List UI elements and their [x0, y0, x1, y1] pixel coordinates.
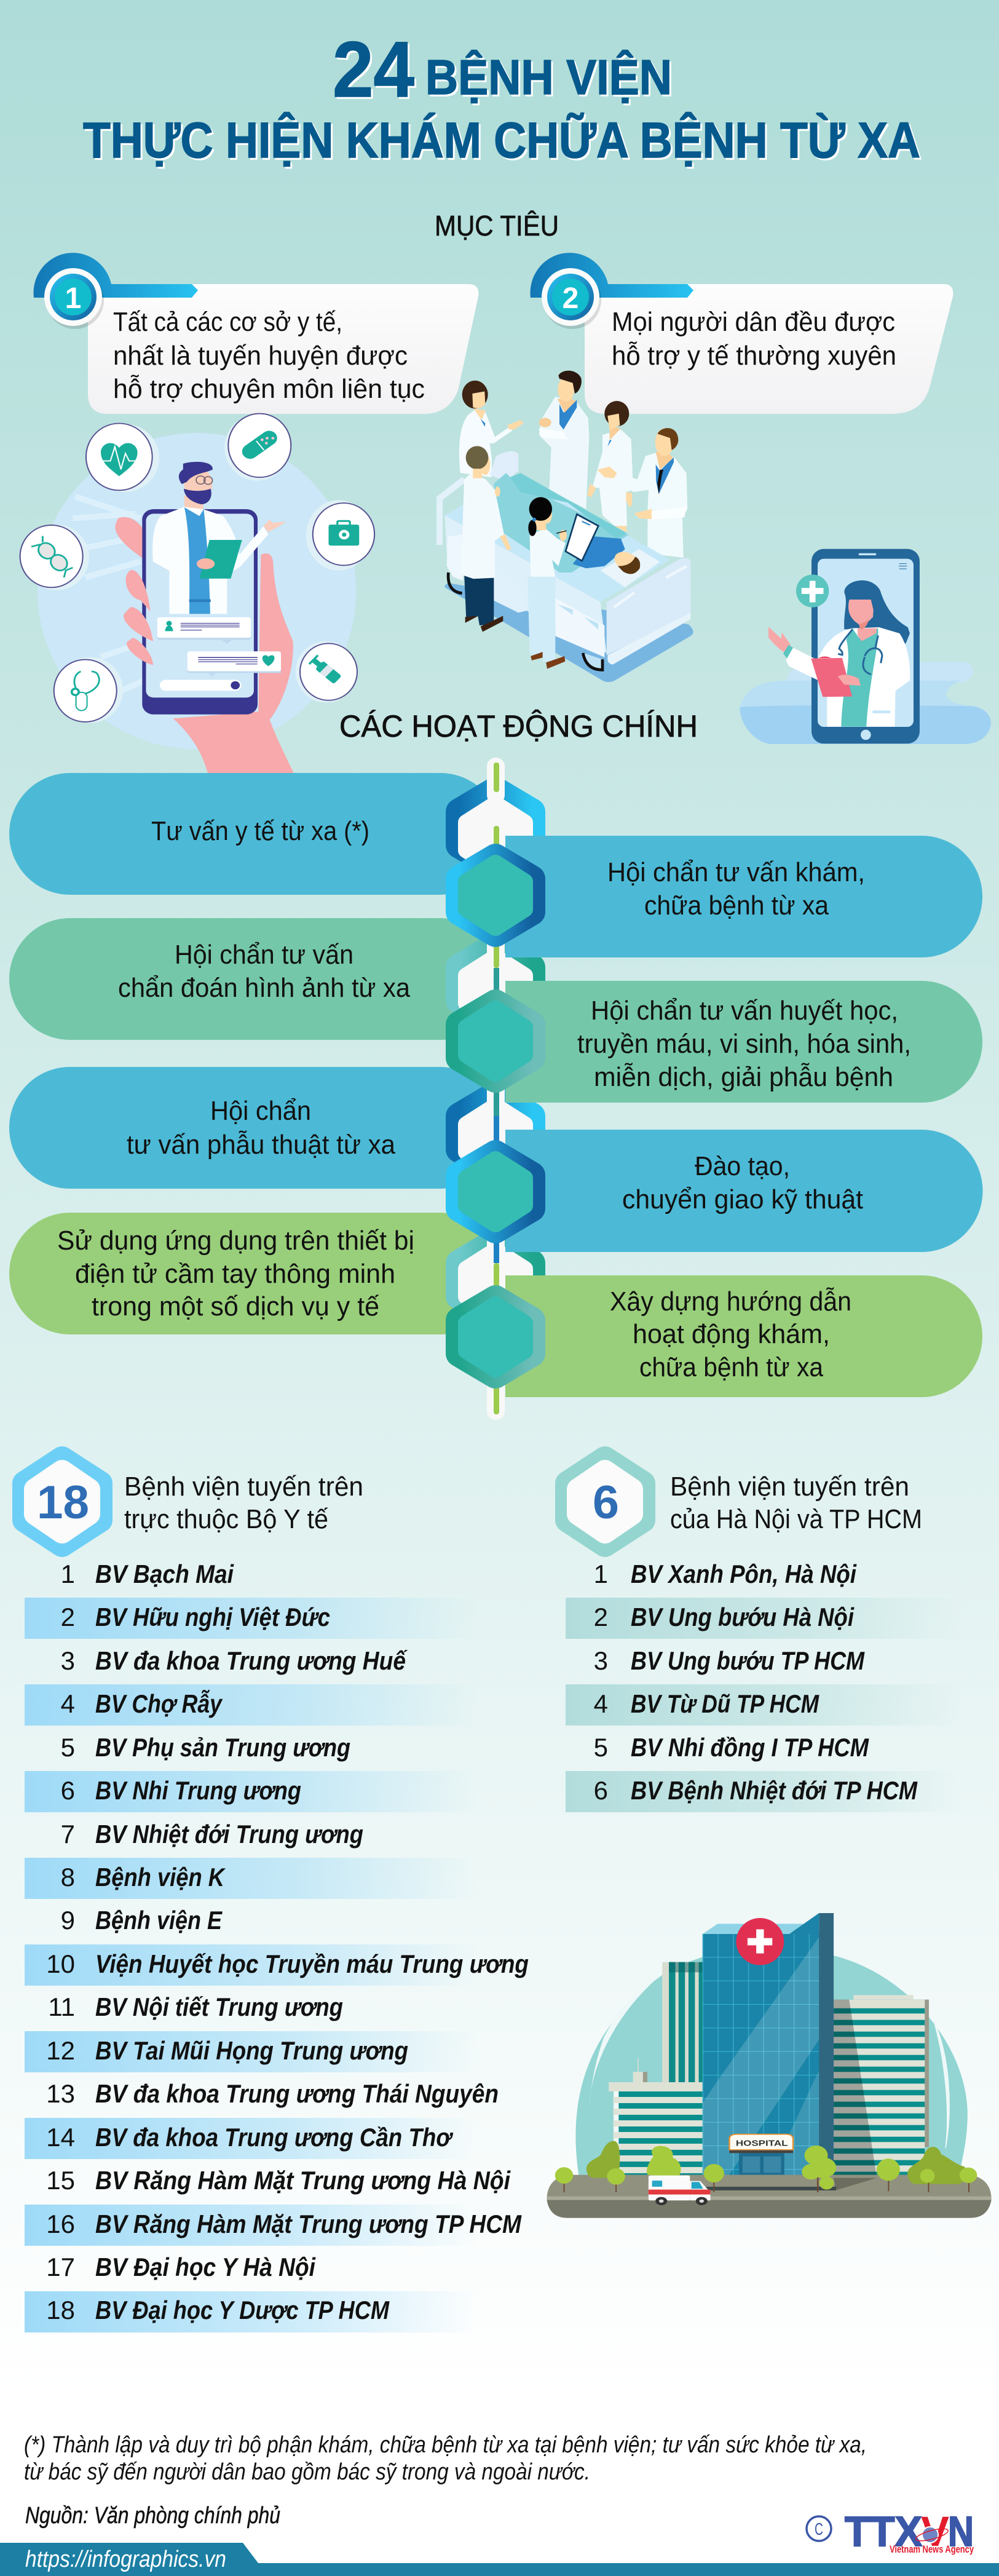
activity labels: Đào tạo, [695, 1151, 790, 1181]
right activity pills [505, 836, 982, 1397]
activity labels: miễn dịch, giải phẫu bệnh [594, 1062, 893, 1092]
list: 6 hospitals of Hanoi and HCMC: 3 [594, 1646, 608, 1675]
heading: 18 hospitals: Bệnh viện tuyến trên [124, 1472, 363, 1502]
list: 6 hospitals of Hanoi and HCMC: 4 [594, 1689, 608, 1718]
list: 18 hospitals under the Ministry of Health: 7 [61, 1820, 75, 1849]
top finger [115, 517, 148, 561]
list: 18 hospitals under the Ministry of Health: 15 [46, 2166, 75, 2195]
list: 18 hospitals under the Ministry of Health: BV Tai Mũi Họng Trung ương [95, 2036, 408, 2065]
list: 18 hospitals under the Ministry of Health: BV Răng Hàm Mặt Trung ương Hà Nội [95, 2166, 511, 2195]
panel: goal 1: 1 [65, 282, 81, 315]
list: 18 hospitals under the Ministry of Health: BV Nội tiết Trung ương [95, 1992, 343, 2021]
logo: TTXVN: TTX [845, 2508, 922, 2555]
list: 6 hospitals of Hanoi and HCMC: BV Ung bướu Hà Nội [631, 1603, 855, 1631]
goal 2 text: hỗ trợ y tế thường xuyên [612, 341, 896, 371]
logo: TTXVN: V [921, 2508, 949, 2555]
list: 18 hospitals under the Ministry of Health: BV Chợ Rẫy [95, 1689, 223, 1718]
left column building [633, 1962, 703, 2083]
list: 18 hospitals under the Ministry of Health: 1 [61, 1559, 75, 1588]
list: 6 hospitals of Hanoi and HCMC: BV Xanh Pôn, Hà Nội [631, 1559, 857, 1588]
doctor: man with crossed arms [539, 371, 589, 509]
goal 1 text: Tất cả các cơ sở y tế, [113, 307, 342, 337]
list: 18 hospitals under the Ministry of Health: BV đa khoa Trung ương Huế [95, 1646, 408, 1675]
list: 18 hospitals under the Ministry of Health: 10 [46, 1949, 75, 1978]
phone [811, 549, 920, 743]
list: 6 hospitals of Hanoi and HCMC: BV Bệnh Nhiệt đới TP HCM [631, 1776, 918, 1805]
logo: TTXVN: N [948, 2508, 974, 2555]
goal 2 text [612, 307, 896, 371]
ambulance [649, 2176, 711, 2205]
icon: bandage [228, 414, 291, 477]
list: 6 hospitals of Hanoi and HCMC [566, 1559, 962, 1812]
phone [142, 509, 258, 715]
central glass tower [703, 1913, 834, 2190]
badge: 6 hospitals: 6 [593, 1476, 619, 1529]
panel: goal 1 [34, 253, 478, 414]
activity labels: Hội chẩn tư vấn khám, [607, 857, 865, 887]
activity labels: chuyển giao kỹ thuật [622, 1184, 863, 1215]
heading: 6 hospitals [670, 1472, 922, 1534]
doctor: woman short hair [587, 401, 633, 533]
list: 18 hospitals under the Ministry of Health: BV Bạch Mai [95, 1559, 234, 1588]
list: 18 hospitals under the Ministry of Health [25, 1559, 529, 2332]
activity labels: Sử dụng ứng dụng trên thiết bị [57, 1226, 414, 1256]
backdrop dome [575, 1946, 968, 2177]
activity labels: chữa bệnh từ xa [639, 1352, 823, 1382]
goal 1 text: hỗ trợ chuyên môn liên tục [113, 374, 425, 404]
left low building [609, 2082, 703, 2177]
list: 18 hospitals under the Ministry of Health: 12 [46, 2036, 75, 2065]
doctor: woman back left [459, 381, 524, 477]
female doctor [768, 581, 910, 727]
hospital sign and door: HOSPITAL [736, 2138, 788, 2147]
activity labels: truyền máu, vi sinh, hóa sinh, [577, 1029, 911, 1059]
title: BỆNH VIỆN [425, 50, 672, 105]
goal 1 text: nhất là tuyến huyện được [113, 341, 408, 371]
illustration: phone with female doctor [740, 549, 991, 744]
list: 18 hospitals under the Ministry of Health: BV Hữu nghị Việt Đức [95, 1603, 330, 1631]
list: 18 hospitals under the Ministry of Health: Bệnh viện K [95, 1863, 226, 1892]
logo: TTXVN: C [815, 2519, 823, 2538]
heading: mục tiêu: MỤC TIÊU [435, 210, 559, 242]
list: 18 hospitals under the Ministry of Health: 8 [61, 1863, 75, 1892]
activity labels: chẩn đoán hình ảnh từ xa [118, 973, 410, 1003]
activity labels: Tư vấn y tế từ xa (*) [151, 816, 369, 846]
trees [555, 2141, 977, 2192]
red cross sign [736, 1918, 784, 1965]
list: 18 hospitals under the Ministry of Health: 9 [61, 1906, 75, 1935]
activity labels: Hội chẩn tư vấn huyết học, [591, 996, 898, 1026]
activity labels: Hội chẩn tư vấn [175, 940, 353, 970]
doctor in phone [152, 462, 286, 614]
heading: các hoạt động chính: CÁC HOẠT ĐỘNG CHÍNH [339, 709, 698, 743]
footnote: từ bác sỹ đến người dân bao gồm bác sỹ trong và ngoài nước. [24, 2459, 590, 2485]
footnote [24, 2432, 867, 2485]
icon: plus [796, 574, 829, 608]
heading: 6 hospitals: của Hà Nội và TP HCM [670, 1504, 922, 1534]
goal 2 text: Mọi người dân đều được [612, 307, 895, 337]
heading: 6 hospitals: Bệnh viện tuyến trên [670, 1472, 909, 1502]
panel: goal 2: 2 [563, 282, 578, 315]
illustration: hospital building [547, 1913, 992, 2218]
list: 18 hospitals under the Ministry of Health: BV Nhi Trung ương [95, 1776, 301, 1805]
logo: TTXVN [807, 2508, 974, 2555]
list: 6 hospitals of Hanoi and HCMC: 5 [594, 1733, 608, 1762]
heading: 18 hospitals: trực thuộc Bộ Y tế [124, 1504, 328, 1534]
list: 18 hospitals under the Ministry of Health: 13 [46, 2079, 75, 2108]
list: 18 hospitals under the Ministry of Health: 3 [61, 1646, 75, 1675]
title: 24 [333, 26, 414, 114]
goal 1 text [113, 307, 425, 404]
list: 18 hospitals under the Ministry of Health: 18 [46, 2296, 75, 2324]
activity labels: chữa bệnh từ xa [644, 890, 829, 921]
activity labels: tư vấn phẫu thuật từ xa [127, 1130, 396, 1160]
bed [440, 451, 693, 682]
illustration: doctors around patient bed [440, 371, 693, 682]
panel: activities chain [9, 758, 982, 1420]
doctor: man from back [461, 446, 511, 632]
list: 18 hospitals under the Ministry of Health: 6 [61, 1776, 75, 1805]
doctor: man with tie [598, 428, 687, 558]
list: 18 hospitals under the Ministry of Health: 11 [48, 1992, 75, 2021]
panel: goal 2 [531, 253, 953, 414]
chat bubbles [157, 617, 281, 691]
right building [834, 1995, 929, 2178]
list: 6 hospitals of Hanoi and HCMC: 6 [594, 1776, 608, 1805]
footer bar [0, 2543, 999, 2576]
street [547, 2175, 992, 2218]
list: 18 hospitals under the Ministry of Health: 14 [46, 2123, 75, 2152]
list: 18 hospitals under the Ministry of Health: BV Đại học Y Dược TP HCM [95, 2296, 390, 2324]
title: THỰC HIỆN KHÁM CHỮA BỆNH TỪ XA [83, 113, 920, 168]
icon: medical case [313, 503, 374, 565]
hospital sign and door [729, 2134, 793, 2189]
rear hexagons [459, 790, 532, 1318]
icon: syringe [300, 643, 357, 700]
list: 18 hospitals under the Ministry of Health: BV Nhiệt đới Trung ương [95, 1820, 363, 1849]
illustration: phone held in hand with doctor and medical icons [20, 414, 374, 775]
logo: TTXVN: Vietnam News Agency [890, 2543, 974, 2555]
icon: heart rate [86, 424, 152, 490]
doctor: woman with clipboard [527, 497, 598, 669]
left activity pills [9, 773, 501, 1334]
activity labels: Hội chẩn [210, 1096, 311, 1126]
badge: 18 hospitals [25, 1459, 100, 1545]
badge: 6 hospitals [567, 1459, 643, 1545]
activity labels [57, 816, 911, 1382]
list: 6 hospitals of Hanoi and HCMC: BV Ung bướu TP HCM [631, 1646, 865, 1675]
list: 18 hospitals under the Ministry of Health: BV Phụ sản Trung ương [95, 1733, 350, 1762]
heading: 18 hospitals [124, 1472, 363, 1534]
fingers [124, 570, 153, 665]
list: 6 hospitals of Hanoi and HCMC: BV Từ Dũ TP HCM [631, 1689, 819, 1718]
list: 18 hospitals under the Ministry of Health: 17 [46, 2253, 75, 2281]
list: 18 hospitals under the Ministry of Health: BV Đại học Y Hà Nội [95, 2253, 316, 2281]
list: 18 hospitals under the Ministry of Health: 5 [61, 1733, 75, 1762]
front hexagons [459, 857, 532, 1375]
badge: 18 hospitals: 18 [37, 1476, 89, 1529]
list: 18 hospitals under the Ministry of Health: Bệnh viện E [95, 1906, 223, 1935]
icon: stethoscope [54, 660, 117, 722]
list: 18 hospitals under the Ministry of Health: 4 [61, 1689, 75, 1718]
list: 6 hospitals of Hanoi and HCMC: BV Nhi đồng I TP HCM [631, 1733, 869, 1762]
footnote: (*) Thành lập và duy trì bộ phận khám, chữa bệnh từ xa tại bệnh viện; tư vấn sức khỏe từ xa, [24, 2432, 867, 2458]
source: Nguồn: Văn phòng chính phủ [25, 2503, 280, 2529]
activity labels: Xây dựng hướng dẫn [610, 1286, 851, 1317]
list: 18 hospitals under the Ministry of Health: BV đa khoa Trung ương Thái Nguyên [95, 2079, 499, 2108]
list: 6 hospitals of Hanoi and HCMC: 2 [594, 1603, 608, 1631]
list: 18 hospitals under the Ministry of Health: BV đa khoa Trung ương Cần Thơ [95, 2123, 453, 2152]
list: 18 hospitals under the Ministry of Health: 16 [46, 2209, 75, 2238]
hand palm [173, 553, 294, 775]
list: 18 hospitals under the Ministry of Health: 2 [61, 1603, 75, 1631]
list: 6 hospitals of Hanoi and HCMC: 1 [594, 1559, 608, 1588]
footer bar: https://infographics.vn [25, 2546, 226, 2572]
list: 18 hospitals under the Ministry of Health: Viện Huyết học Truyền máu Trung ương [95, 1949, 529, 1978]
activity labels: trong một số dịch vụ y tế [92, 1291, 379, 1322]
vertical connector line [487, 758, 505, 1420]
icon halos [24, 414, 371, 723]
title [83, 26, 920, 168]
list: 18 hospitals under the Ministry of Health: BV Răng Hàm Mặt Trung ương TP HCM [95, 2209, 522, 2238]
activity labels: hoạt động khám, [633, 1319, 830, 1349]
cloud background [740, 662, 991, 744]
activity labels: điện tử cầm tay thông minh [75, 1259, 395, 1289]
icon: DNA [20, 525, 83, 587]
